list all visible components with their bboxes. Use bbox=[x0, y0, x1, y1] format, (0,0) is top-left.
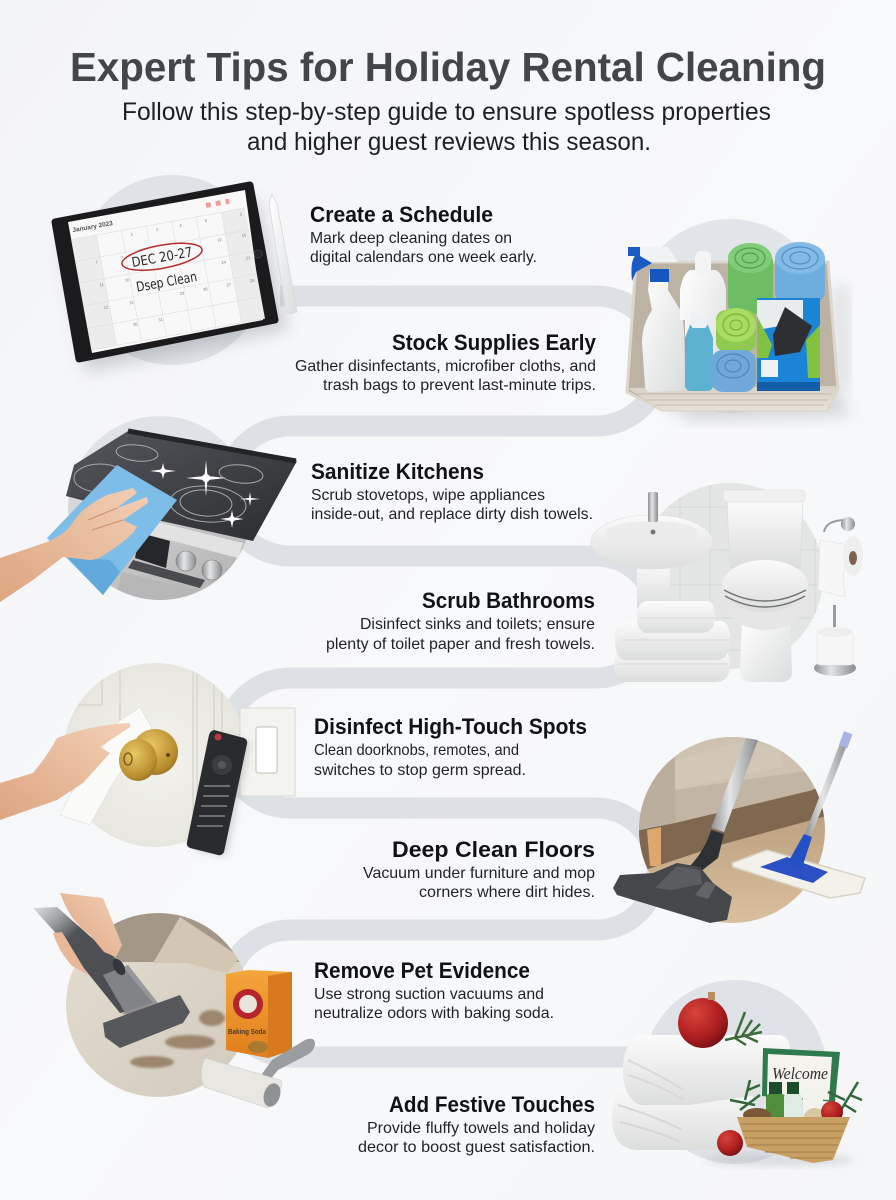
calendar screen: 10 bbox=[125, 277, 131, 283]
step 2 text bbox=[295, 330, 597, 394]
step 1 text: Create a Schedule bbox=[310, 202, 493, 227]
folded towels bbox=[612, 1035, 790, 1150]
calendar screen: 27 bbox=[226, 282, 231, 288]
step 7 text: neutralize odors with baking soda. bbox=[314, 1005, 554, 1022]
calendar screen: 2 bbox=[156, 227, 159, 232]
calendar screen: 4 bbox=[179, 223, 183, 228]
sink bbox=[591, 492, 713, 608]
step 4 text bbox=[326, 588, 595, 653]
sofa bbox=[639, 737, 824, 870]
step 4 text: plenty of toilet paper and fresh towels. bbox=[326, 636, 595, 653]
blue cloth bbox=[47, 465, 177, 595]
illustration: pet hair removal bbox=[33, 893, 315, 1109]
wicker basket bbox=[737, 1117, 850, 1163]
calendar screen: 12 bbox=[103, 304, 109, 310]
step 3 text: Scrub stovetops, wipe appliances bbox=[311, 487, 545, 504]
calendar screen: 23 bbox=[179, 290, 185, 296]
calendar screen: 28 bbox=[133, 321, 139, 327]
title: Expert Tips for Holiday Rental Cleaning bbox=[70, 44, 826, 90]
calendar screen: 28 bbox=[250, 277, 256, 283]
step 7 text bbox=[314, 958, 554, 1022]
step 3 text: inside-out, and replace dirty dish towels. bbox=[311, 506, 593, 523]
green microfiber roll bbox=[728, 243, 773, 314]
calendar screen: 13 bbox=[129, 300, 135, 305]
toilet roll holder bbox=[818, 517, 863, 597]
small blue roll bbox=[711, 350, 756, 392]
illustration: festive towels and welcome basket bbox=[612, 980, 862, 1166]
step 3 text: Sanitize Kitchens bbox=[311, 459, 484, 484]
pine sprigs bbox=[730, 1080, 862, 1115]
calendar screen: 21 bbox=[245, 255, 251, 261]
calendar screen: 11 bbox=[99, 282, 105, 287]
toilet bbox=[722, 490, 808, 682]
step 1 text bbox=[310, 202, 537, 266]
step 2 text: Gather disinfectants, microfiber cloths, and bbox=[295, 358, 596, 375]
illustration: vacuum and mop on floor bbox=[613, 730, 865, 923]
hand and arm bbox=[0, 723, 130, 820]
spray bottle bbox=[628, 247, 685, 392]
remote bbox=[187, 730, 250, 856]
handwritten note: Dsep Clean bbox=[135, 270, 198, 296]
illustration: supply basket bbox=[627, 219, 850, 420]
step 1 text: Mark deep cleaning dates on bbox=[310, 230, 512, 247]
calendar screen: 15 bbox=[241, 232, 247, 238]
serpentine connector ribbon bbox=[225, 296, 661, 1057]
step 6 text: Vacuum under furniture and mop bbox=[363, 865, 595, 882]
baking soda box bbox=[226, 970, 292, 1058]
toiletries bbox=[743, 1082, 843, 1134]
step 6 text: corners where dirt hides. bbox=[419, 884, 595, 901]
step 5 text bbox=[314, 714, 587, 779]
vacuum with wand bbox=[613, 738, 758, 923]
stainless stove front bbox=[68, 497, 246, 600]
glass cooktop bbox=[66, 431, 297, 541]
step 4 text: Disinfect sinks and toilets; ensure bbox=[360, 616, 595, 633]
blue dish soap bottle bbox=[685, 303, 713, 391]
calendar screen: January 2023 bbox=[72, 220, 114, 234]
pet hair tufts bbox=[122, 1006, 225, 1068]
basket body bbox=[627, 262, 838, 410]
calendar screen: 12 bbox=[217, 237, 222, 242]
step 8 text: Add Festive Touches bbox=[389, 1092, 595, 1117]
step 8 text: Provide fluffy towels and holiday bbox=[367, 1120, 595, 1137]
step 6 text bbox=[363, 837, 595, 901]
mop bbox=[732, 731, 865, 898]
stacked towels bbox=[614, 601, 730, 682]
trash bag box bbox=[757, 298, 820, 391]
lime microfiber roll bbox=[716, 308, 756, 352]
spare roll stand bbox=[814, 605, 856, 676]
calendar screen: 1 bbox=[130, 231, 134, 237]
illustration: bathroom fixtures bbox=[591, 483, 863, 682]
pet vacuum bbox=[33, 907, 190, 1048]
calendar screen: 5 bbox=[204, 218, 208, 223]
small striped bauble bbox=[717, 1130, 743, 1156]
knobs bbox=[176, 551, 222, 580]
lint roller bbox=[201, 1039, 315, 1109]
calendar screen bbox=[69, 196, 265, 350]
step 3 text bbox=[311, 459, 593, 523]
illustration: tablet calendar and stylus bbox=[55, 175, 297, 372]
subtitle: Follow this step-by-step guide to ensure spotless properties bbox=[122, 98, 771, 126]
calendar screen: 26 bbox=[203, 286, 209, 292]
subtitle bbox=[122, 98, 771, 156]
white bottle bbox=[680, 251, 726, 390]
sofa and cushion bbox=[112, 913, 240, 973]
illustration: door knob, remote and switch bbox=[0, 660, 295, 856]
calendar screen: 2 bbox=[239, 212, 243, 217]
hand and arm bbox=[0, 488, 148, 602]
step 2 text: Stock Supplies Early bbox=[392, 330, 597, 355]
switch plate bbox=[240, 708, 295, 796]
white rag bbox=[60, 707, 152, 825]
step 8 text: decor to boost guest satisfaction. bbox=[358, 1139, 595, 1156]
thumb fingers below handle bbox=[53, 932, 88, 975]
calendar screen: 7 bbox=[120, 255, 123, 260]
welcome card: Welcome bbox=[772, 1064, 828, 1083]
gold knob bbox=[119, 729, 178, 781]
step 1 text: digital calendars one week early. bbox=[310, 249, 537, 266]
hand bbox=[60, 893, 122, 957]
step 7 text: Use strong suction vacuums and bbox=[314, 986, 544, 1003]
welcome card bbox=[762, 1048, 840, 1102]
calendar screen: DEC 20-27 bbox=[131, 245, 194, 271]
sparkles bbox=[150, 460, 260, 528]
red ornament with pine bbox=[678, 992, 762, 1048]
step 5 text: switches to stop germ spread. bbox=[314, 762, 526, 779]
red circled dates bbox=[120, 238, 204, 275]
step 6 text: Deep Clean Floors bbox=[392, 837, 595, 862]
subtitle: and higher guest reviews this season. bbox=[247, 128, 651, 156]
step 8 text bbox=[358, 1092, 595, 1156]
blue microfiber roll bbox=[775, 242, 825, 302]
calendar screen: 7 bbox=[95, 259, 98, 265]
illustration: stove and hand with cloth bbox=[0, 416, 297, 602]
step 4 text: Scrub Bathrooms bbox=[422, 588, 595, 613]
icon: stylus bbox=[269, 194, 297, 314]
calendar screen: 24 bbox=[221, 259, 227, 265]
step 5 text: Clean doorknobs, remotes, and bbox=[314, 742, 519, 759]
step 5 text: Disinfect High-Touch Spots bbox=[314, 714, 587, 739]
step 2 text: trash bags to prevent last-minute trips. bbox=[323, 377, 596, 394]
step 7 text: Remove Pet Evidence bbox=[314, 958, 530, 983]
baking soda box: Baking Soda bbox=[228, 1027, 267, 1036]
calendar screen: 31 bbox=[158, 317, 164, 322]
